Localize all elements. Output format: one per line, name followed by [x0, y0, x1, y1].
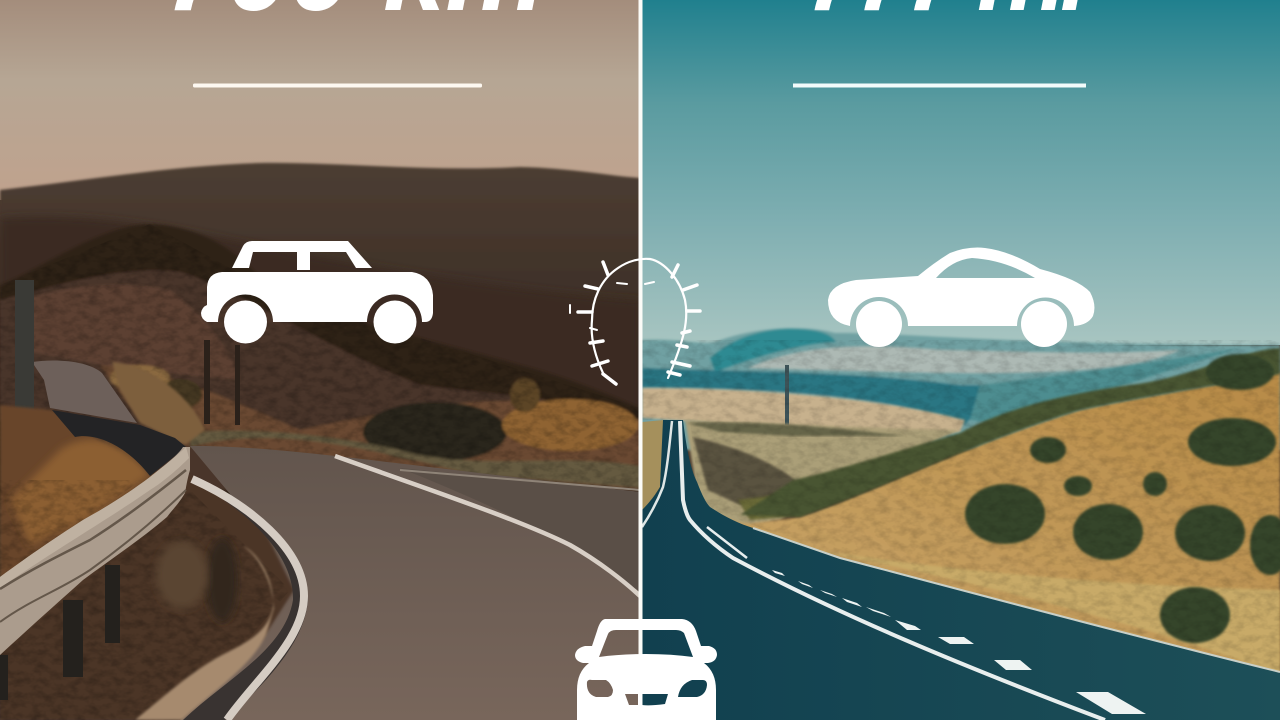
road dashed line [707, 527, 747, 558]
guardrail [0, 447, 190, 655]
distant teal hills [640, 328, 1280, 450]
mid field [685, 420, 960, 530]
left verge [642, 420, 663, 510]
right heading rule [793, 84, 1086, 88]
golden hillside [700, 372, 1280, 680]
utility pole [785, 365, 789, 425]
ground texture [0, 480, 290, 720]
right road surface tone [400, 468, 640, 592]
panel: right straight road scene [640, 0, 1280, 720]
orange embankment [0, 404, 163, 576]
dirt shoulder [135, 546, 274, 720]
dark field [693, 437, 795, 505]
dark bushes [206, 538, 238, 622]
green strip [738, 496, 786, 521]
left dark mid hillside [0, 217, 636, 312]
guardrail posts [0, 565, 120, 700]
dashes [772, 570, 1146, 714]
distant road section [32, 360, 137, 423]
hillside shrubs [965, 354, 1280, 643]
ridge bushes [740, 348, 1280, 517]
icon: hand-drawn bulb outline [570, 259, 700, 384]
sand field [642, 388, 965, 440]
right sky [640, 0, 1280, 345]
left heading rule [193, 84, 482, 88]
upper road edge line [400, 470, 640, 490]
roadside poles [204, 340, 240, 425]
icon: boxy car [201, 241, 433, 344]
dry grass mound [10, 440, 150, 545]
panel: left winding road scene [0, 0, 640, 720]
tan bank beyond the road [112, 362, 205, 445]
signpost [15, 280, 34, 412]
left far hills [0, 161, 638, 297]
road [642, 420, 1280, 720]
dark area behind guardrail [52, 410, 186, 476]
centre road white line [335, 456, 640, 596]
icon: sports car [828, 248, 1094, 347]
bush line on field [687, 422, 905, 436]
landscape texture [640, 340, 1280, 680]
lower grass [852, 556, 1280, 671]
road edge white line [192, 479, 304, 720]
hillside texture [0, 225, 638, 488]
icon: front-view car [575, 619, 717, 720]
road centre solid line [680, 421, 1105, 720]
center divider line [638, 0, 642, 720]
main road surface [180, 446, 640, 720]
left sky [0, 0, 640, 200]
roadside dark strip [183, 478, 308, 720]
lower left ground [0, 475, 294, 720]
road left line [642, 421, 672, 527]
road edge line [753, 528, 1280, 672]
left foreground hillside [0, 224, 640, 500]
